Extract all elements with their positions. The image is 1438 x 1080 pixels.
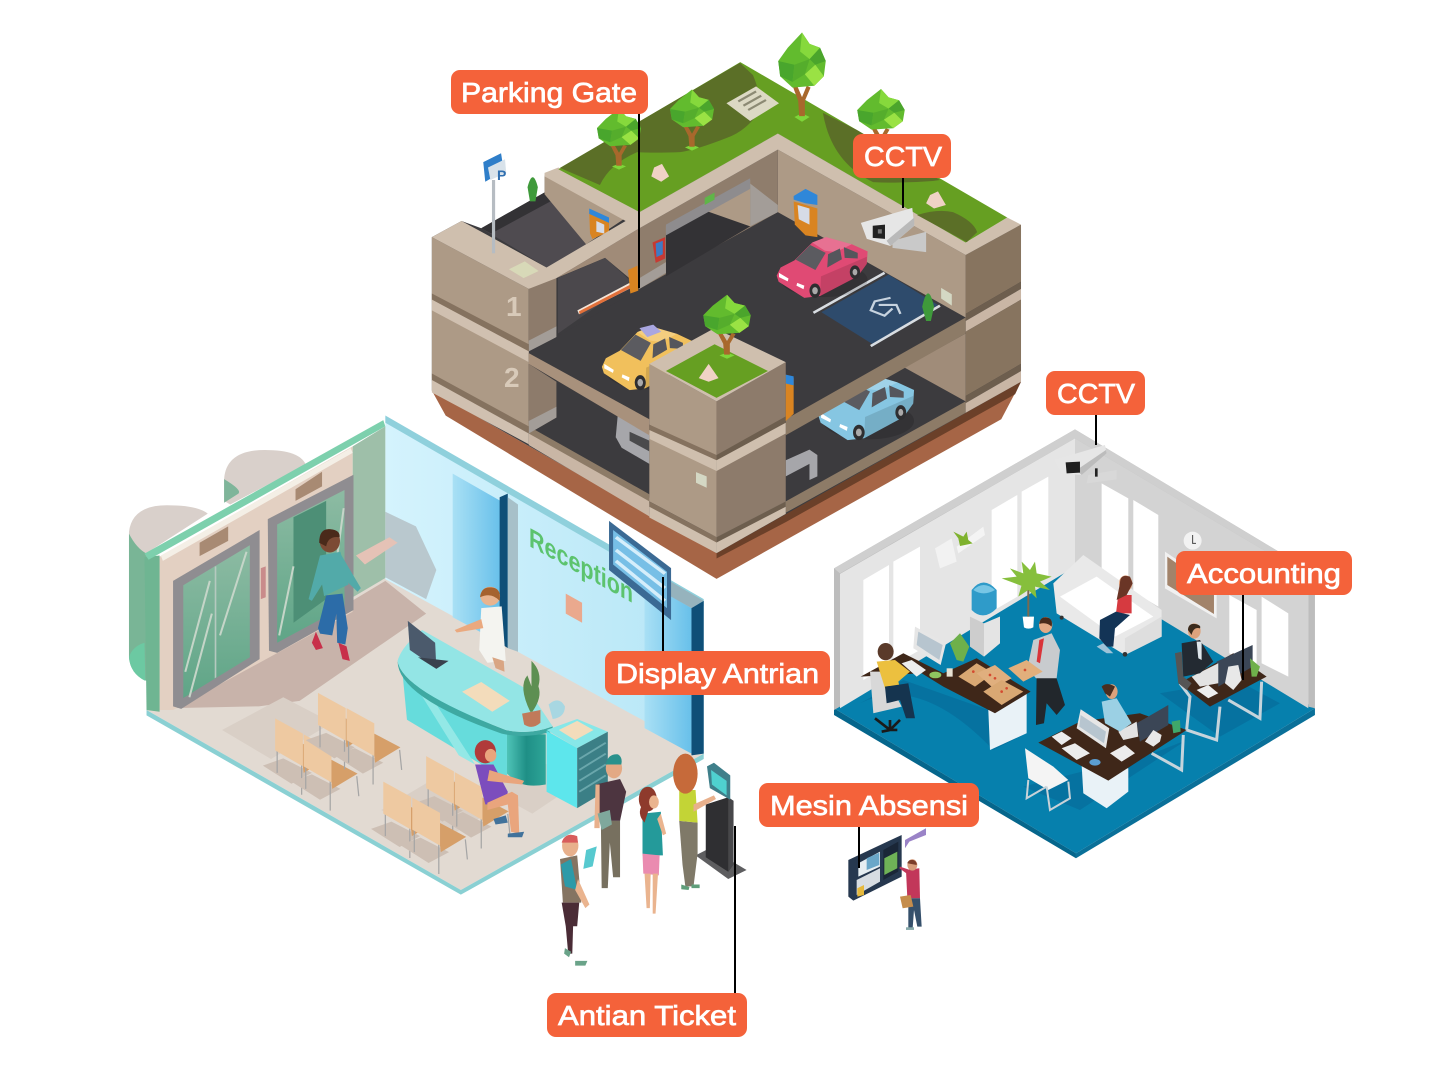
rocks xyxy=(651,164,946,209)
gate opening xyxy=(666,180,750,262)
label: Antian Ticket xyxy=(547,826,747,1037)
central pillar xyxy=(649,364,717,462)
tree 4 xyxy=(857,89,905,155)
tree 2 xyxy=(670,90,714,151)
back wall xyxy=(639,150,778,289)
tree 1 xyxy=(778,32,826,122)
label: CCTV parking: CCTV xyxy=(864,141,942,172)
person: woman yellow top xyxy=(673,754,716,890)
wall above ramp xyxy=(556,228,639,289)
person: man with pizza xyxy=(1008,617,1065,725)
floor xyxy=(834,567,1315,853)
panel: parking building xyxy=(432,32,1021,579)
windows xyxy=(863,477,1288,680)
clock xyxy=(1184,532,1202,550)
label: Mesin Absensi: Mesin Absensi xyxy=(770,790,968,821)
parking sign letter: P xyxy=(497,167,506,183)
pipes xyxy=(616,416,649,464)
level number 1: 1 xyxy=(506,291,522,322)
label: Accounting: Accounting xyxy=(1187,558,1341,589)
panel: attendance machine xyxy=(848,828,926,930)
person: woman at desk xyxy=(870,643,915,732)
floor edge bands xyxy=(529,353,649,435)
glass back wall xyxy=(385,417,704,754)
person: receptionist xyxy=(455,587,506,672)
grass xyxy=(558,62,1007,242)
panel: accounting office xyxy=(834,429,1315,858)
pink car xyxy=(777,237,868,298)
right wall xyxy=(778,150,966,317)
label: Parking Gate xyxy=(451,70,648,288)
disabled parking xyxy=(821,275,938,344)
soil base xyxy=(432,382,1021,579)
keypad xyxy=(261,566,266,599)
shelf and wall art xyxy=(935,538,957,568)
person: man with cap xyxy=(594,754,626,888)
label: CCTV parking xyxy=(853,134,951,208)
left wall xyxy=(159,446,353,710)
label: Mesin Absensi xyxy=(759,783,979,868)
panel: reception lobby xyxy=(129,415,704,895)
tree 5 xyxy=(703,295,751,359)
right wall xyxy=(1075,437,1308,708)
label: Antian Ticket: Antian Ticket xyxy=(558,1000,736,1031)
parking sign xyxy=(492,180,495,253)
person: woman teal xyxy=(639,787,666,914)
notice board xyxy=(1165,552,1217,618)
grass dark patches xyxy=(560,63,977,242)
person: seated woman xyxy=(475,740,524,837)
water cooler xyxy=(970,582,1000,657)
cctv camera xyxy=(1054,445,1117,483)
label: CCTV office xyxy=(1046,371,1145,445)
lower wall right xyxy=(904,334,966,401)
desk right xyxy=(1179,645,1267,740)
desk center xyxy=(1038,705,1187,808)
person: woman at center desk xyxy=(1102,684,1132,732)
level number 2: 2 xyxy=(504,362,520,393)
blue car xyxy=(819,375,914,440)
wall panel xyxy=(356,537,398,565)
left pillar xyxy=(432,237,529,353)
wall cap xyxy=(834,429,1315,710)
label: Display Antrian: Display Antrian xyxy=(616,658,819,689)
person: seated woman on sofa xyxy=(1097,575,1133,653)
reception desk xyxy=(398,621,608,808)
person: man with book xyxy=(560,835,597,966)
person at machine xyxy=(899,859,922,930)
ramp pit xyxy=(481,192,586,267)
reception wall sign: Reception xyxy=(529,523,633,610)
chairs xyxy=(263,718,330,795)
wall sign plate xyxy=(566,594,582,623)
tree 3 xyxy=(597,108,641,170)
label: Parking Gate: Parking Gate xyxy=(461,77,637,108)
panel: queue people and ticket kiosk xyxy=(560,754,747,966)
door left xyxy=(173,530,260,709)
desk left xyxy=(861,627,1031,750)
back cylinders xyxy=(129,450,306,681)
floor edge xyxy=(147,710,704,895)
red device xyxy=(652,237,665,263)
yellow car xyxy=(602,326,693,390)
upper floor xyxy=(529,212,966,459)
top strip xyxy=(385,415,704,606)
floor xyxy=(147,570,704,890)
person: walking woman xyxy=(309,529,361,661)
cctv camera xyxy=(893,232,926,252)
machine body xyxy=(848,828,926,901)
small vent xyxy=(509,261,539,278)
label: Accounting xyxy=(1176,551,1352,680)
person: man at right desk xyxy=(1175,623,1213,690)
label: Display Antrian xyxy=(605,577,830,695)
lower band right xyxy=(786,401,966,513)
white chair xyxy=(1025,748,1070,810)
floor shadows xyxy=(860,680,1280,810)
gate arm xyxy=(577,283,631,314)
wall shadow xyxy=(385,512,436,599)
ramp entrance xyxy=(558,258,632,334)
display antrian screen xyxy=(609,521,671,620)
palm plant xyxy=(1002,562,1052,629)
right pillar xyxy=(966,225,1021,314)
plant xyxy=(522,661,565,727)
building base fill xyxy=(432,134,1021,553)
orange kiosk xyxy=(794,201,817,237)
roof vent xyxy=(726,86,779,121)
door signs xyxy=(200,472,322,556)
label: CCTV office: CCTV xyxy=(1057,378,1135,409)
sofa xyxy=(1053,555,1162,657)
left wall xyxy=(840,437,1075,708)
door right xyxy=(268,475,353,653)
rim xyxy=(432,134,1021,289)
kiosk xyxy=(696,763,747,879)
columns xyxy=(453,474,500,643)
kiosk small xyxy=(589,212,609,239)
